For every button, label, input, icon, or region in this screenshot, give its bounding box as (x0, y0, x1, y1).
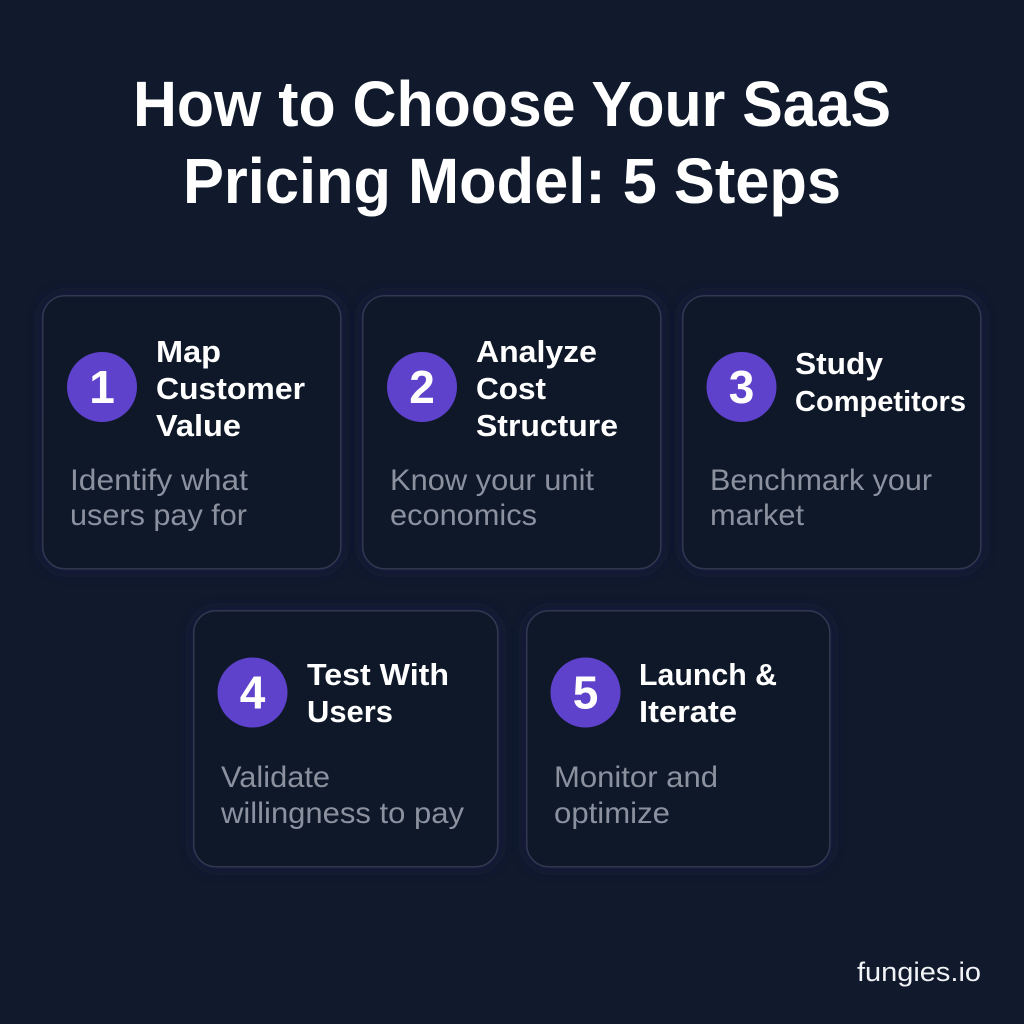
text: know your unit economics: Know your unit (390, 464, 595, 497)
icon: number 2 badge (387, 352, 457, 422)
panel: step 1 map customer value (41, 294, 343, 571)
text: validate willingness to pay: Validate (221, 761, 330, 794)
heading: analyze cost structure: Analyze (476, 334, 597, 369)
icon: number 3 badge (706, 352, 776, 422)
heading: launch and iterate: Iterate (639, 694, 737, 729)
heading: launch and iterate: Launch & (639, 657, 777, 692)
text: monitor and optimize: Monitor and (554, 761, 718, 794)
panel: step 4 test with users (192, 609, 500, 869)
title: Pricing Model: 5 Steps (183, 145, 841, 217)
text: identify what users pay for: users pay for (70, 499, 247, 532)
icon: number 5 badge (550, 658, 620, 728)
text: monitor and optimize: optimize (554, 797, 670, 830)
text: identify what users pay for (70, 464, 249, 532)
icon: number 2 badge: 2 (409, 361, 435, 413)
heading: map customer value: Map (156, 334, 221, 369)
brand: fungies.io: fungies.io (857, 957, 981, 987)
heading: study competitors: Study (795, 346, 884, 381)
text: validate willingness to pay (220, 761, 464, 830)
heading: test with users (307, 657, 449, 729)
text: know your unit economics: economics (390, 499, 537, 532)
heading: launch and iterate (639, 657, 777, 729)
panel: step 3 study competitors (681, 294, 983, 571)
title (133, 68, 891, 217)
title: How to Choose Your SaaS (133, 68, 891, 140)
panel: step 5 launch and iterate (525, 609, 832, 869)
heading: analyze cost structure (476, 334, 618, 443)
icon: number 5 badge: 5 (573, 666, 598, 718)
heading: test with users: Test With (307, 657, 449, 692)
heading: study competitors: Competitors (795, 386, 966, 418)
text: benchmark your market: market (710, 499, 805, 532)
heading: analyze cost structure: Structure (476, 408, 618, 443)
panel: step 2 analyze cost structure (361, 294, 663, 571)
heading: study competitors (795, 346, 966, 418)
heading: map customer value (156, 334, 305, 443)
icon: number 4 badge: 4 (240, 666, 266, 718)
text: benchmark your market (710, 464, 932, 532)
heading: map customer value: Customer (156, 371, 305, 406)
text: identify what users pay for: Identify what (70, 464, 249, 497)
text: know your unit economics (390, 464, 595, 532)
heading: map customer value: Value (156, 408, 241, 443)
icon: number 1 badge: 1 (89, 361, 115, 413)
heading: analyze cost structure: Cost (476, 371, 546, 406)
icon: number 3 badge: 3 (729, 361, 754, 413)
text: validate willingness to pay: willingness to pay (220, 797, 464, 830)
heading: test with users: Users (307, 694, 393, 729)
text: monitor and optimize (554, 761, 718, 830)
icon: number 1 badge (67, 352, 137, 422)
text: benchmark your market: Benchmark your (710, 464, 932, 497)
icon: number 4 badge (218, 658, 288, 728)
